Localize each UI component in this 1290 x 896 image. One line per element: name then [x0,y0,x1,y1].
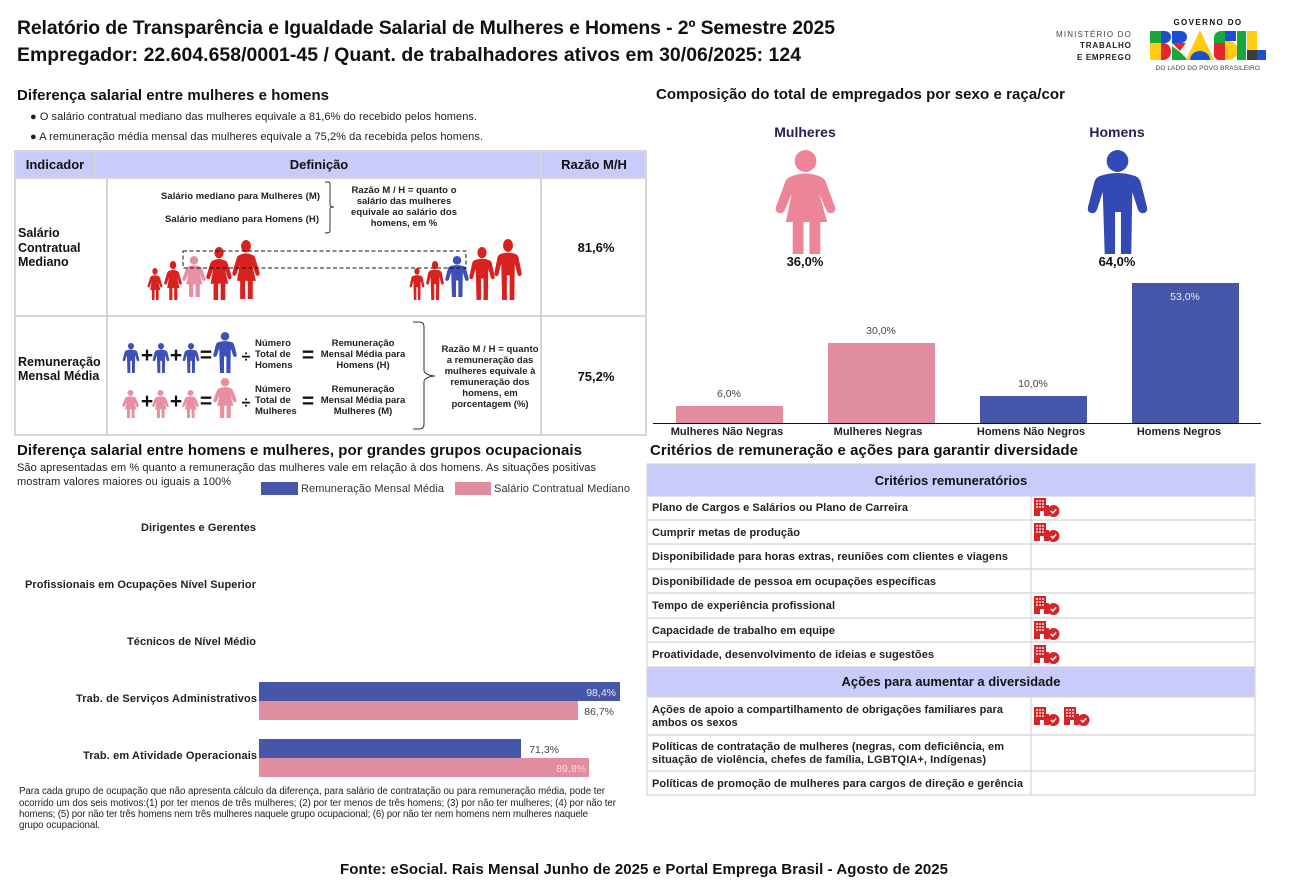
row label: remuneração mensal média [18,355,101,383]
text block: summary bullets: ● O salário contratual mediano das mulheres equivale a 81,6% do recebido pelos homens. [30,111,477,123]
formula: men: Remuneração [332,338,395,349]
figure: homens [1088,124,1147,269]
icon: family of men [410,239,522,300]
criteria rows: Disponibilidade de pessoa em ocupações específicas [652,576,936,588]
formula: women: = [200,390,212,413]
formula: men: Número [255,338,291,349]
formula: women: + [141,390,153,413]
table header: Indicador [26,157,84,172]
bars: atividade operacionais: 89,8% [556,763,586,775]
logo: Ministério do Trabalho e Emprego: TRABALHO [1080,41,1132,50]
definition text: salário mediano: Salário mediano para Mulheres (M) [161,191,320,202]
category labels [671,426,1221,438]
bars: serviços administrativos: 98,4% [586,687,616,699]
formula: men: ÷ [242,349,251,366]
bar: mulheres negras: 30,0% [866,325,896,337]
logo: Ministério do Trabalho e Emprego: E EMPREGO [1077,53,1132,62]
formula: men: Total de [255,349,291,360]
bars: serviços administrativos [259,682,620,720]
row label: salário contratual mediano: Salário [18,226,60,240]
formula: women [122,378,406,418]
figure: mulheres: Mulheres [774,124,836,140]
logo: Governo do Brasil [1150,18,1266,72]
formula: men [123,332,406,373]
row label: remuneração mensal média: Remuneração [18,355,101,369]
formula: women: Mulheres (M) [334,406,392,417]
table header: Razão M/H [561,157,627,172]
formula: men: Homens [255,360,292,371]
formula: women: ÷ [242,395,251,412]
definition text: remuneração: mulheres equivale à [445,366,536,377]
legend [261,482,630,495]
criteria rows: Proatividade, desenvolvimento de ideias e sugestões [652,649,934,661]
formula: women: Total de [255,395,291,406]
formula: women: Remuneração [332,384,395,395]
row label: remuneração mensal média: Mensal Média [18,369,100,383]
heading: critérios: Critérios de remuneração e ações para garantir diversidade [650,442,1078,459]
definition text: remuneração: a remuneração das [447,355,533,366]
category labels: Trab. em Atividade Operacionais [83,750,257,762]
legend: Salário Contratual Mediano [494,483,630,495]
bar chart: composição [653,283,1261,438]
bar: homens negros [1132,283,1239,423]
icons: company with check [1034,498,1060,664]
heading: diferença por grupos ocupacionais: Diferença salarial entre homens e mulheres, por grandes grupos ocupacionais [17,442,582,459]
category labels: Homens Negros [1137,426,1221,438]
action rows: situação de violência, chefes de família, LGBTQIA+, Indígenas) [652,754,986,766]
category labels [25,522,257,762]
definition text: remuneração [442,344,539,410]
logo: Ministério do Trabalho e Emprego [1056,30,1132,62]
text block: footnote [19,786,617,831]
text block: chart description: São apresentadas em % quanto a remuneração das mulheres vale em relação à dos homens. As situações positivas [17,462,596,474]
bars: serviços administrativos: 86,7% [584,706,614,718]
action rows: Políticas de promoção de mulheres para cargos de direção e gerência [652,778,1024,790]
legend: Remuneração Mensal Média [301,483,445,495]
icons: company with check, actions [1034,707,1090,726]
text block: footnote: ocorrido um dos seis motivos:(1) por ter menos de três mulheres; (2) por ter menos de três homens; (3) por não ter mulheres; (4) por não ter [19,798,617,809]
formula: women: + [170,390,182,413]
figure: homens: 64,0% [1099,254,1136,269]
text block: chart description: mostram valores maiores ou iguais a 100% [17,476,231,488]
category labels: Homens Não Negros [977,426,1085,438]
logo: Governo do Brasil: GOVERNO DO [1173,18,1243,27]
bar: homens negros: 53,0% [1170,291,1200,303]
action rows: Políticas de contratação de mulheres (negras, com deficiência, em [652,741,1004,753]
source footer: Fonte: eSocial. Rais Mensal Junho de 2025 e Portal Emprega Brasil - Agosto de 2025 [340,861,948,878]
definition text: remuneração: remuneração dos [450,377,530,388]
bar chart: grupos ocupacionais [25,522,620,777]
bar: homens não negros: 10,0% [1018,378,1048,390]
panel: indicator table [15,151,646,435]
value: 75,2%: 75,2% [578,369,615,384]
criteria rows: Cumprir metas de produção [652,527,800,539]
formula: women: Mulheres [255,406,297,417]
figure: mulheres [774,124,836,269]
header: critérios remuneratórios: Critérios remuneratórios [875,473,1027,488]
formula: women: Número [255,384,291,395]
formula: men: = [302,344,314,367]
logo: Ministério do Trabalho e Emprego: MINISTÉRIO DO [1056,30,1132,39]
text block: summary bullets: ● A remuneração média mensal das mulheres equivale a 75,2% da recebida pelos homens. [30,131,483,143]
bar: homens não negros [980,378,1087,423]
category labels: Dirigentes e Gerentes [141,522,256,534]
action rows [652,704,1024,790]
category labels: Trab. de Serviços Administrativos [76,693,257,705]
definition text: remuneração: homens, em [462,388,518,399]
figure: homens: Homens [1089,124,1145,140]
category labels: Profissionais em Ocupações Nível Superior [25,579,257,591]
text block: summary bullets [30,111,483,143]
text block: footnote: homens; (5) por não ter três homens nem três mulheres naquele grupo ocupacional; (6) por não ter nem homens nem mulheres naquele [19,809,588,820]
table header [26,157,627,172]
criteria rows: Tempo de experiência profissional [652,600,835,612]
heading: diferença salarial: Diferença salarial entre mulheres e homens [17,87,329,104]
category labels: Mulheres Não Negras [671,426,783,438]
row label: salário contratual mediano: Contratual [18,241,80,255]
dashed median box [183,251,466,268]
formula: men: Homens (H) [336,360,390,371]
definition text: remuneração: Razão M / H = quanto [442,344,539,355]
definition text: salário mediano: Salário mediano para Homens (H) [165,214,319,225]
action rows: ambos os sexos [652,717,738,729]
heading: composição: Composição do total de empregados por sexo e raça/cor [656,86,1065,103]
category labels: Mulheres Negras [834,426,922,438]
criteria rows: Capacidade de trabalho em equipe [652,625,835,637]
header: ações: Ações para aumentar a diversidade [842,674,1060,689]
formula: women: = [302,390,314,413]
formula: men: + [170,344,182,367]
criteria rows [652,502,1008,661]
table header: Definição [290,157,348,172]
text block: footnote: grupo ocupacional. [19,820,100,831]
category labels: Técnicos de Nível Médio [127,636,256,648]
definition text: salário mediano: Razão M / H = quanto o [352,185,457,196]
text block: footnote: Para cada grupo de ocupação que não apresenta cálculo da diferença, para salário de contratação ou para remuneração média, pode ter [19,786,606,797]
bar: mulheres não negras: 6,0% [717,388,741,400]
panel: criteria table [647,464,1255,795]
bars: atividade operacionais: 71,3% [529,744,559,756]
figure: mulheres: 36,0% [787,254,824,269]
text block: chart description [17,462,596,488]
criteria rows: Disponibilidade para horas extras, reuniões com clientes e viagens [652,551,1008,563]
formula: men: Mensal Média para [321,349,406,360]
action rows: Ações de apoio a compartilhamento de obrigações familiares para [652,704,1004,716]
title: Empregador: 22.604.658/0001-45 / Quant. de trabalhadores ativos em 30/06/2025: 124 [17,44,801,66]
definition text: salário mediano: equivale ao salário dos [351,207,457,218]
brace: salário mediano [325,182,334,233]
icon: family of women [148,240,260,300]
formula: men: + [141,344,153,367]
definition text: salário mediano [161,185,457,229]
bar: mulheres negras [828,325,935,423]
row label: salário contratual mediano: Mediano [18,255,69,269]
title: Relatório de Transparência e Igualdade Salarial de Mulheres e Homens - 2º Semestre 2025 [17,17,835,39]
definition text: salário mediano: homens, em % [371,218,438,229]
criteria rows: Plano de Cargos e Salários ou Plano de Carreira [652,502,909,514]
bar: mulheres não negras [676,388,783,423]
row label: salário contratual mediano [18,226,80,269]
title [17,17,835,66]
formula: men: = [200,344,212,367]
bars: atividade operacionais [259,739,589,777]
logo: Governo do Brasil: DO LADO DO POVO BRASILEIRO [1156,65,1260,72]
brace: remuneração [413,322,435,429]
definition text: salário mediano: salário das mulheres [357,196,451,207]
formula: women: Mensal Média para [321,395,406,406]
value: 81,6%: 81,6% [578,240,615,255]
definition text: remuneração: porcentagem (%) [451,399,529,410]
